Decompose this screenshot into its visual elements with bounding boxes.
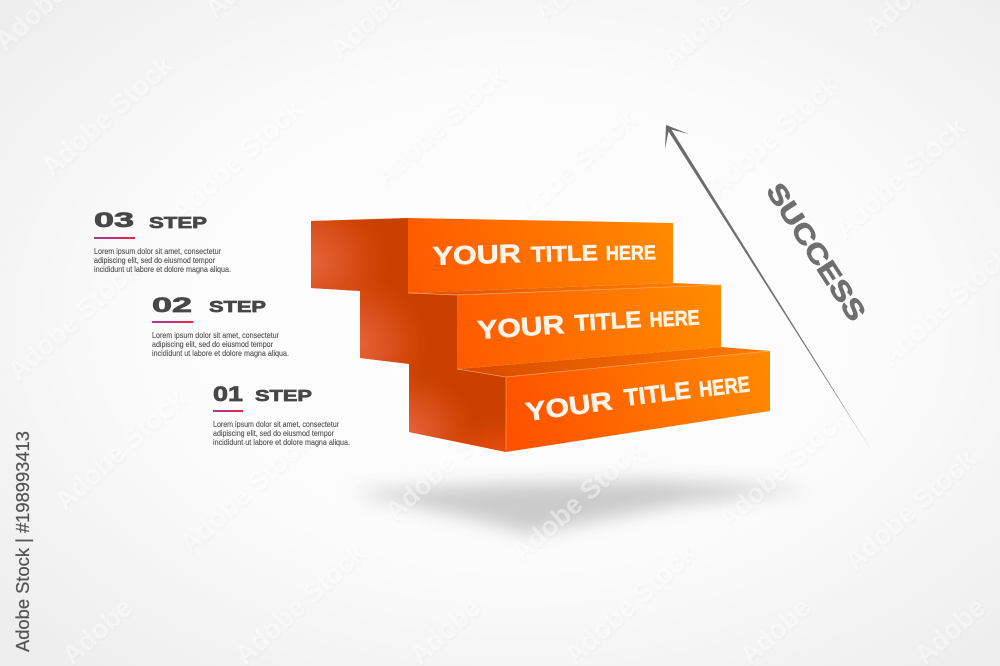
number 01: 01 bbox=[213, 383, 243, 406]
watermarks: Adobe Stock bbox=[829, 111, 972, 244]
description: adipiscing elit, sed do eiusmod tempor bbox=[94, 256, 215, 265]
description bbox=[213, 420, 350, 447]
step 3 top surface bbox=[408, 283, 721, 295]
watermarks: Adobe Stock bbox=[166, 93, 309, 226]
staircase bbox=[311, 218, 770, 452]
title: step 2: YOUR bbox=[476, 309, 565, 345]
watermarks: Adobe Stock bbox=[712, 401, 855, 534]
description bbox=[152, 331, 289, 358]
arrow: success direction bbox=[665, 125, 873, 453]
title: step 3: YOUR bbox=[432, 238, 521, 271]
label step: STEP bbox=[209, 299, 266, 316]
label step: STEP bbox=[149, 215, 207, 232]
description: adipiscing elit, sed do eiusmod tempor bbox=[152, 340, 273, 349]
description: Lorem ipsum dolor sit amet, consectetur bbox=[94, 247, 221, 256]
stock id: Adobe Stock | #198993413 bbox=[13, 431, 33, 652]
description: adipiscing elit, sed do eiusmod tempor bbox=[213, 429, 334, 438]
watermarks: Adobe Stock bbox=[174, 426, 317, 559]
watermarks: Adobe Stock bbox=[49, 383, 192, 516]
accent bar bbox=[152, 321, 193, 323]
watermarks: Adobe Stock bbox=[369, 59, 512, 192]
step 2 front bbox=[457, 285, 721, 369]
description: incididunt ut labore et dolore magna aliqua. bbox=[213, 438, 350, 447]
step 02 block bbox=[152, 294, 289, 358]
description bbox=[94, 247, 231, 274]
title: step 1 bbox=[524, 371, 751, 427]
step edge highlights bbox=[408, 285, 770, 452]
number 03: 03 bbox=[94, 209, 134, 232]
description: incididunt ut labore et dolore magna aliqua. bbox=[94, 265, 231, 274]
watermarks: Adobe Stock bbox=[839, 443, 982, 576]
title: step 3: TITLE bbox=[530, 240, 598, 267]
watermarks: Adobe Stock bbox=[702, 69, 845, 202]
watermarks: Adobe Stock bbox=[379, 393, 522, 526]
title: step 1: TITLE bbox=[622, 377, 692, 412]
watermarks: Adobe Stock bbox=[36, 49, 179, 182]
title: step 1: YOUR bbox=[524, 385, 614, 427]
description: incididunt ut labore et dolore magna aliqua. bbox=[152, 349, 289, 358]
accent bar bbox=[94, 237, 135, 239]
floor shadow bbox=[350, 480, 812, 534]
label step: STEP bbox=[255, 388, 312, 405]
title: step 3: HERE bbox=[606, 242, 656, 265]
accent bar bbox=[213, 410, 243, 412]
stair side face bbox=[311, 218, 506, 452]
watermarks: Adobe Stock bbox=[2, 253, 145, 386]
number 02: 02 bbox=[152, 294, 192, 317]
description: Lorem ipsum dolor sit amet, consectetur bbox=[213, 420, 339, 429]
title: step 3 bbox=[432, 238, 656, 271]
step 03 block bbox=[94, 209, 231, 274]
title: step 1: HERE bbox=[698, 371, 751, 402]
step 01 block bbox=[213, 383, 350, 447]
title: step 2: TITLE bbox=[574, 306, 642, 336]
step 1 top surface bbox=[457, 347, 770, 377]
watermarks: Adobe Stock bbox=[506, 434, 649, 567]
watermarks: Adobe Stock bbox=[499, 103, 642, 236]
step 3 front bbox=[408, 218, 673, 293]
title: step 2 bbox=[476, 306, 700, 345]
label: success: SUCCESS bbox=[760, 178, 872, 326]
title: step 2: HERE bbox=[649, 306, 700, 332]
step 1 front bbox=[506, 351, 770, 452]
description: Lorem ipsum dolor sit amet, consectetur bbox=[152, 331, 279, 340]
